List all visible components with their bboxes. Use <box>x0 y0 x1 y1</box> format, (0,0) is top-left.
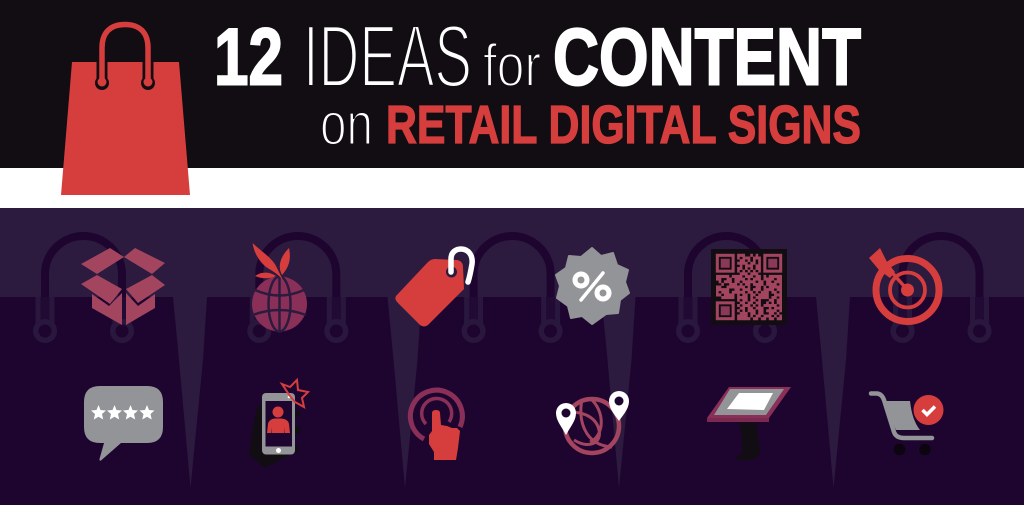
icon: touch finger <box>410 390 462 460</box>
title line 2 <box>320 90 861 158</box>
icon: review speech bubble <box>84 386 163 461</box>
background bag pattern <box>36 236 989 488</box>
dark purple lower background <box>0 297 1024 505</box>
purple upper background <box>0 208 1024 297</box>
icon: QR code <box>711 249 787 325</box>
white gap band <box>0 168 1024 208</box>
icon: percent badge <box>556 248 629 324</box>
title line 1: 12 <box>214 12 283 102</box>
icon: red shopping bag <box>61 24 190 195</box>
title line 2: RETAIL DIGITAL SIGNS <box>386 95 861 155</box>
title <box>214 6 861 158</box>
title line 2: on <box>320 90 373 158</box>
title line 1: CONTENT <box>553 12 861 102</box>
icon: selfie phone in hand <box>249 380 308 468</box>
title line 1: for <box>483 32 541 99</box>
icon: open box <box>81 248 165 325</box>
icon: shopping cart with check <box>871 394 944 455</box>
title line 1 <box>214 6 861 106</box>
black header band <box>0 0 1024 168</box>
icon: target with arrow <box>869 248 939 322</box>
icon: globe with leaves <box>252 243 307 332</box>
icon: kiosk <box>707 387 791 460</box>
icon: globe with location pins <box>556 391 629 453</box>
icon: price tag <box>395 249 472 326</box>
title line 1: IDEAS <box>303 6 472 106</box>
